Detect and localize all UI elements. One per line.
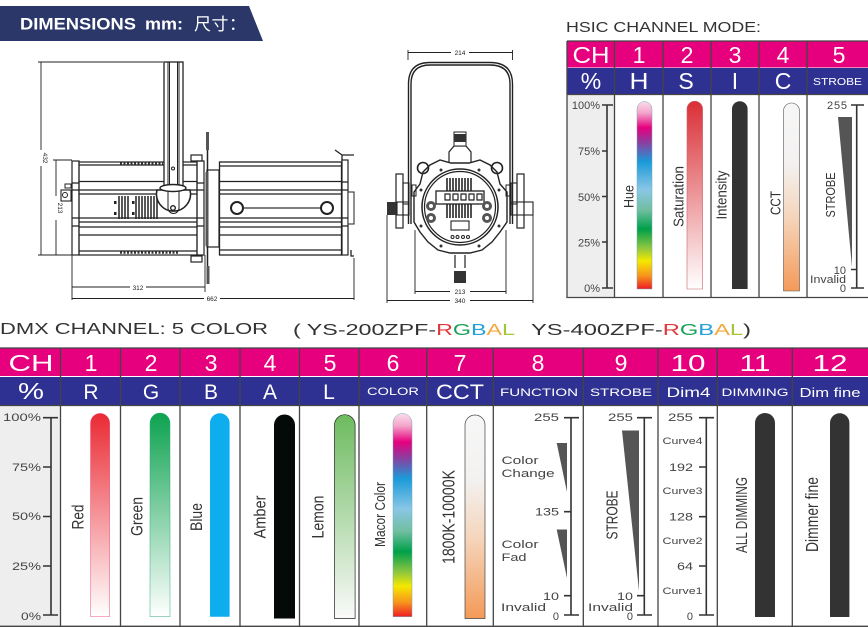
dimension lines side view: 432 — [41, 153, 48, 164]
function scale: Color — [502, 539, 539, 551]
hue bar: Hue — [620, 185, 636, 208]
DMX pink header row: 11 — [740, 350, 770, 376]
HSIC percent scale: 0% — [584, 283, 600, 295]
DMX percent scale: 100% — [3, 412, 41, 424]
HSIC pink header row: 4 — [777, 42, 790, 68]
dim4 curve scale: 128 — [669, 512, 693, 524]
lamp head — [414, 132, 507, 283]
red bar: Red — [68, 504, 88, 530]
heading: HSIC channel mode: HSIC CHANNEL MODE: — [566, 19, 761, 36]
HSIC percent scale: 75% — [578, 146, 600, 158]
strobe scale 9: 10 — [617, 591, 633, 603]
HSIC pink header row: 5 — [833, 42, 845, 68]
function scale: 255 — [534, 412, 559, 424]
DMX pink header row: 2 — [145, 350, 157, 376]
function scale: Invalid — [501, 602, 546, 614]
macro color bar: Macor Color — [373, 482, 389, 547]
DMX blue header row: R — [83, 381, 99, 404]
dimension lines front view: 213 — [455, 289, 466, 296]
yoke — [408, 62, 512, 224]
DMX pink header row — [0, 348, 868, 376]
dim4 curve scale: 255 — [668, 412, 693, 424]
green bar: Green — [128, 497, 146, 536]
dim4 curve scale: Curve2 — [662, 536, 702, 546]
HSIC percent scale: 25% — [578, 238, 600, 250]
HSIC blue header row: STROBE — [813, 77, 862, 88]
heading: dimensions banner — [0, 6, 263, 41]
HSIC strobe scale: 0 — [840, 283, 846, 295]
DMX blue header row: L — [323, 381, 335, 404]
DMX pink header row: 12 — [812, 350, 848, 376]
function scale: 10 — [543, 591, 559, 603]
dimmer fine bar: Dimmer fine — [802, 477, 822, 552]
DMX table grid — [0, 348, 868, 627]
strobe scale 9: Invalid — [588, 602, 633, 614]
CCT bar — [768, 103, 800, 291]
HSIC percent scale — [567, 94, 614, 297]
HSIC pink header row — [567, 41, 868, 68]
DMX blue header row: Dim4 — [666, 384, 711, 400]
green bar — [128, 413, 170, 617]
function scale: Color — [502, 455, 539, 467]
DMX pink header row: 8 — [532, 350, 544, 376]
DMX percent scale: 50% — [12, 511, 41, 523]
HSIC pink header row: 3 — [729, 42, 741, 68]
CCT bar 7: 1800K-10000K — [438, 470, 458, 564]
dim4 curve scale — [662, 412, 714, 623]
saturation bar: Saturation — [672, 166, 688, 227]
heading: dimensions banner: 尺寸： — [194, 15, 246, 34]
lamp rear body — [61, 155, 204, 262]
HSIC strobe scale: 255 — [827, 100, 847, 112]
HSIC pink header row: 1 — [633, 42, 645, 68]
HSIC blue header row: C — [775, 68, 791, 94]
front view technical drawing — [387, 50, 533, 305]
HSIC blue header row: % — [581, 68, 601, 94]
blue bar: Blue — [187, 503, 206, 531]
dim4 curve scale: Curve3 — [662, 486, 702, 496]
dim4 curve scale: Curve4 — [662, 436, 702, 446]
DMX percent scale: 0% — [21, 611, 41, 623]
dimension lines front view: 340 — [455, 298, 466, 305]
all dimming bar: ALL DIMMING — [734, 477, 751, 553]
DMX blue header row: FUNCTION — [500, 387, 578, 399]
function scale: Change — [502, 468, 554, 480]
CCT bar 7 — [438, 415, 485, 618]
DMX pink header row: CH — [8, 350, 54, 376]
DMX blue header row: Dim fine — [800, 385, 860, 400]
function scale: 0 — [553, 611, 559, 623]
dimension lines side view: 312 — [133, 285, 144, 292]
CCT bar: CCT — [768, 191, 784, 215]
dim4 curve scale: 0 — [687, 611, 693, 623]
HSIC strobe scale: 10 — [834, 265, 846, 277]
DMX blue header row: CCT — [436, 381, 484, 404]
side view technical drawing — [38, 62, 354, 303]
dimension lines side view — [38, 62, 354, 303]
dimension lines front view: 214 — [455, 50, 466, 57]
heading: model 400: YS-400ZPF- R G B A L ) — [531, 322, 751, 339]
DMX blue header row: G — [143, 381, 159, 404]
DMX blue header row: STROBE — [590, 387, 652, 399]
lemon bar — [308, 415, 355, 618]
DMX blue header row: A — [263, 381, 277, 404]
macro color bar — [373, 414, 412, 617]
HSIC blue header row: H — [630, 68, 648, 94]
DMX pink header row: 10 — [670, 350, 706, 376]
lamp front body — [220, 150, 354, 256]
DMX blue header row: DIMMING — [722, 387, 788, 399]
dimension lines side view: 662 — [207, 296, 218, 303]
DMX pink header row: 4 — [264, 350, 277, 376]
strobe scale 9: 255 — [608, 412, 633, 424]
HSIC strobe scale: Invalid — [810, 274, 846, 286]
lemon bar: Lemon — [308, 496, 328, 538]
DMX blue header row: COLOR — [367, 386, 419, 398]
HSIC percent scale: 50% — [578, 192, 600, 204]
panel: DMX channel table — [0, 348, 868, 627]
HSIC pink header row: 2 — [681, 42, 693, 68]
DMX blue header row: % — [18, 378, 44, 404]
dim4 curve scale: 64 — [677, 561, 693, 573]
dim4 curve scale: Curve1 — [662, 586, 702, 596]
side locking knobs — [387, 174, 533, 228]
strobe scale 9 — [588, 412, 652, 623]
DMX pink header row: 7 — [454, 350, 466, 376]
strobe scale 9: 0 — [627, 611, 633, 623]
red bar — [68, 413, 110, 617]
HSIC strobe scale — [810, 100, 864, 295]
amber bar: Amber — [250, 495, 270, 538]
HSIC table grid — [567, 41, 868, 298]
DMX percent scale: 25% — [12, 561, 41, 573]
HSIC blue header row: I — [732, 68, 738, 94]
gel frame and flange — [206, 132, 219, 284]
saturation bar — [672, 101, 703, 289]
DMX pink header row: 3 — [205, 350, 217, 376]
dimension lines side view: 213 — [56, 203, 63, 214]
HSIC blue header row: S — [678, 68, 694, 94]
hue bar — [620, 102, 652, 289]
amber bar — [250, 415, 295, 618]
function scale: Fad — [502, 552, 526, 564]
heading: dimensions banner: DIMENSIONS — [20, 16, 136, 34]
DMX pink header row: 9 — [615, 350, 627, 376]
HSIC blue header row — [567, 68, 868, 94]
DMX percent scale — [0, 406, 60, 627]
HSIC strobe scale: STROBE — [823, 172, 838, 218]
heading: model 200: ( YS-200ZPF- R G B A L — [293, 322, 515, 339]
function scale — [501, 412, 579, 623]
blue bar — [187, 413, 230, 617]
dimension lines front view — [387, 50, 533, 305]
DMX pink header row: 1 — [85, 350, 97, 376]
heading: dimensions banner: mm: — [145, 16, 183, 34]
dimmer fine bar — [802, 413, 849, 617]
DMX pink header row: 5 — [324, 350, 336, 376]
intensity bar: Intensity — [714, 170, 730, 220]
DMX blue header row — [0, 377, 868, 406]
strobe scale 9: STROBE — [604, 490, 622, 540]
all dimming bar — [734, 413, 775, 617]
HSIC percent scale: 100% — [572, 100, 600, 112]
HSIC pink header row: CH — [572, 42, 610, 68]
function scale: 135 — [535, 506, 559, 518]
DMX blue header row: B — [204, 381, 218, 404]
intensity bar — [714, 101, 748, 289]
heading: DMX channel 5 color: DMX CHANNEL: 5 COLOR — [0, 321, 268, 338]
panel: HSIC channel table — [567, 41, 868, 298]
DMX pink header row: 6 — [387, 350, 399, 376]
DMX percent scale: 75% — [12, 462, 41, 474]
yoke arm — [156, 62, 190, 214]
dim4 curve scale: 192 — [669, 462, 693, 474]
